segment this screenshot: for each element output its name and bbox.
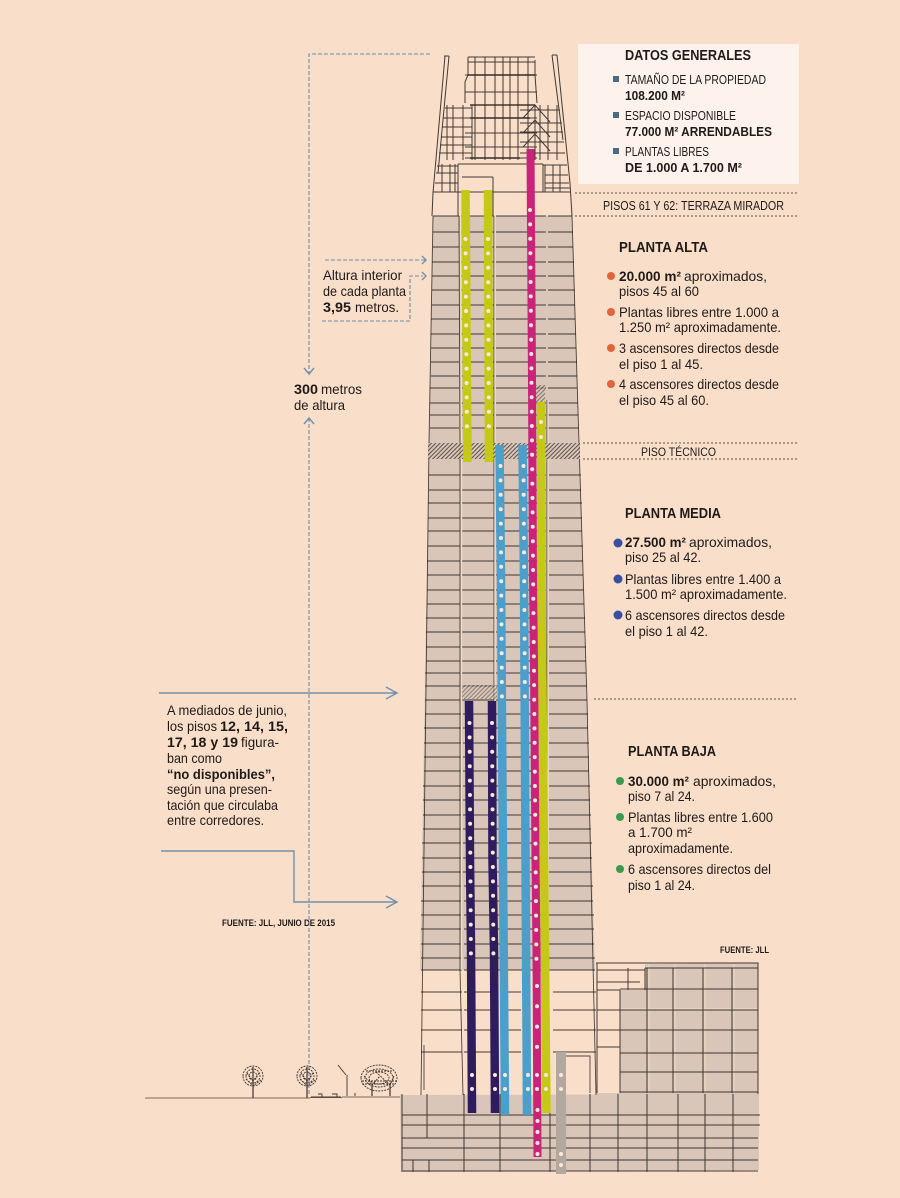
bullet 2: Plantas libres entre 1.600 xyxy=(628,809,773,825)
low-zone purple elevator 2 xyxy=(492,701,495,1113)
divider label line xyxy=(594,698,797,700)
height label: 300 xyxy=(294,381,318,397)
heading: PLANTA BAJA xyxy=(628,744,716,760)
column lines and outer edges xyxy=(421,216,596,1095)
gray floor mass xyxy=(420,216,595,970)
bullet 1: 27.500 m² xyxy=(625,534,686,550)
ground line xyxy=(145,1097,400,1098)
bullet 1 xyxy=(614,534,772,565)
bullet 2: Plantas libres entre 1.400 a xyxy=(625,571,781,587)
available space xyxy=(613,109,772,139)
bullet 2: 1.250 m² aproximadamente. xyxy=(619,319,781,335)
bullet 2: a 1.700 m² xyxy=(628,824,692,840)
tree 2 xyxy=(297,1066,317,1098)
unavailable floors note xyxy=(167,702,288,828)
property size: 108.200 M² xyxy=(625,89,685,103)
arrow: top of unavailable floors xyxy=(159,687,397,699)
pale column gaps xyxy=(460,216,548,970)
free floors: DE 1.000 A 1.700 M² xyxy=(625,161,742,175)
floor height callout: 3,95 xyxy=(323,299,351,315)
free floors xyxy=(613,145,742,175)
unavailable floors note: según una presen- xyxy=(167,781,272,797)
property size xyxy=(613,73,766,103)
unavailable floors note: los pisos xyxy=(167,718,217,734)
bullet 2: 1.500 m² aproximadamente. xyxy=(625,586,787,602)
bullet 2: aproximadamente. xyxy=(628,840,733,856)
bullet 3: piso 1 al 24. xyxy=(628,877,695,893)
unavailable floors note: entre corredores. xyxy=(167,812,264,828)
bullet 1: aproximados, xyxy=(684,268,767,284)
label: piso tecnico xyxy=(583,443,797,459)
bullet 1 xyxy=(616,773,776,804)
height dimension arrow xyxy=(304,54,430,1096)
unavailable floors note: “no disponibles”, xyxy=(167,766,275,782)
bullet 1: 30.000 m² xyxy=(628,773,689,789)
height label: metros xyxy=(321,381,362,397)
floor height callout: metros. xyxy=(355,299,399,315)
free floors: PLANTAS LIBRES xyxy=(625,145,709,159)
heading: PLANTA ALTA xyxy=(619,240,708,256)
bullet 1: piso 25 al 42. xyxy=(625,549,701,565)
property size: TAMAÑO DE LA PROPIEDAD xyxy=(625,73,766,87)
label: piso tecnico: PISO TÉCNICO xyxy=(641,446,716,459)
unavailable floors note: tación que circulaba xyxy=(167,797,278,813)
height label: de altura xyxy=(294,397,345,413)
source note right: FUENTE: JLL xyxy=(720,945,769,955)
upper-zone yellow elevator 1 xyxy=(466,190,468,462)
available space: ESPACIO DISPONIBLE xyxy=(625,109,736,123)
bullet 3: el piso 1 al 45. xyxy=(619,356,703,372)
heading: PLANTA MEDIA xyxy=(625,506,721,522)
bullet 2: Plantas libres entre 1.000 a xyxy=(619,304,779,320)
bullet 3: el piso 1 al 42. xyxy=(625,623,708,639)
bullet 3: 6 ascensores directos desde xyxy=(625,607,785,623)
street furniture xyxy=(311,1065,355,1097)
upper-zone yellow elevator 2 xyxy=(488,190,489,462)
bullet 1: piso 7 al 24. xyxy=(628,788,695,804)
tree 1 xyxy=(243,1066,263,1098)
gray service elevator xyxy=(556,1052,566,1174)
bullet 4: el piso 45 al 60. xyxy=(619,392,709,408)
bullet 3: 6 ascensores directos del xyxy=(628,861,771,877)
podium building on the right xyxy=(596,963,758,1095)
bullet 2 xyxy=(616,809,773,856)
tower crown linework xyxy=(432,55,572,217)
unavailable floors note: ban como xyxy=(167,750,222,766)
bullet 3 xyxy=(616,861,771,893)
basement block xyxy=(400,1094,760,1172)
mid-zone blue elevator 2 xyxy=(522,445,528,1115)
height label xyxy=(294,381,362,413)
bullet 1: aproximados, xyxy=(689,534,772,550)
panel: planta baja xyxy=(616,744,776,893)
unavailable floors note: figura- xyxy=(241,734,279,750)
floor height callout: de cada planta xyxy=(323,283,406,299)
magenta express elevator xyxy=(530,149,538,1157)
bullet 3: 3 ascensores directos desde xyxy=(619,340,779,356)
label: terraza mirador xyxy=(575,193,797,216)
bullet 3 xyxy=(614,607,785,639)
hatch beside upper yellow shaft xyxy=(536,385,545,403)
bullet 4: 4 ascensores directos desde xyxy=(619,376,779,392)
floor height callout: Altura interior xyxy=(323,267,402,283)
tower drawing xyxy=(400,55,760,1174)
bullet 2 xyxy=(607,304,781,335)
floor height callout xyxy=(322,256,426,321)
tree cluster xyxy=(361,1065,397,1096)
high-zone yellow elevator xyxy=(541,402,546,1113)
panel: planta alta xyxy=(607,240,781,408)
bullet 1 xyxy=(607,268,767,299)
label: terraza mirador: PISOS 61 Y 62: TERRAZA MIRADOR xyxy=(603,199,784,213)
hatch above lower zone xyxy=(462,685,497,699)
bullet 1: 20.000 m² xyxy=(619,268,681,284)
bullet 1: pisos 45 al 60 xyxy=(619,283,699,299)
unavailable floors note: A mediados de junio, xyxy=(167,702,287,718)
card: datos generales xyxy=(578,44,799,184)
unavailable floors note: 17, 18 y 19 xyxy=(167,734,238,750)
available space: 77.000 M² ARRENDABLES xyxy=(625,125,772,139)
panel: planta media xyxy=(614,506,787,639)
floor lines xyxy=(421,216,596,1052)
bullet 4 xyxy=(607,376,779,408)
bullet 1: aproximados, xyxy=(693,773,776,789)
unavailable floors note: 12, 14, 15, xyxy=(220,718,288,734)
technical floor hatch band xyxy=(428,443,580,459)
low-zone purple elevator 1 xyxy=(469,701,472,1113)
card heading: DATOS GENERALES xyxy=(625,48,751,64)
mid-zone blue elevator 1 xyxy=(500,445,505,1115)
bullet 3 xyxy=(607,340,779,372)
bullet 2 xyxy=(614,571,787,602)
arrow: bottom of unavailable floors xyxy=(161,851,397,908)
source note left: FUENTE: JLL, JUNIO DE 2015 xyxy=(222,918,335,928)
